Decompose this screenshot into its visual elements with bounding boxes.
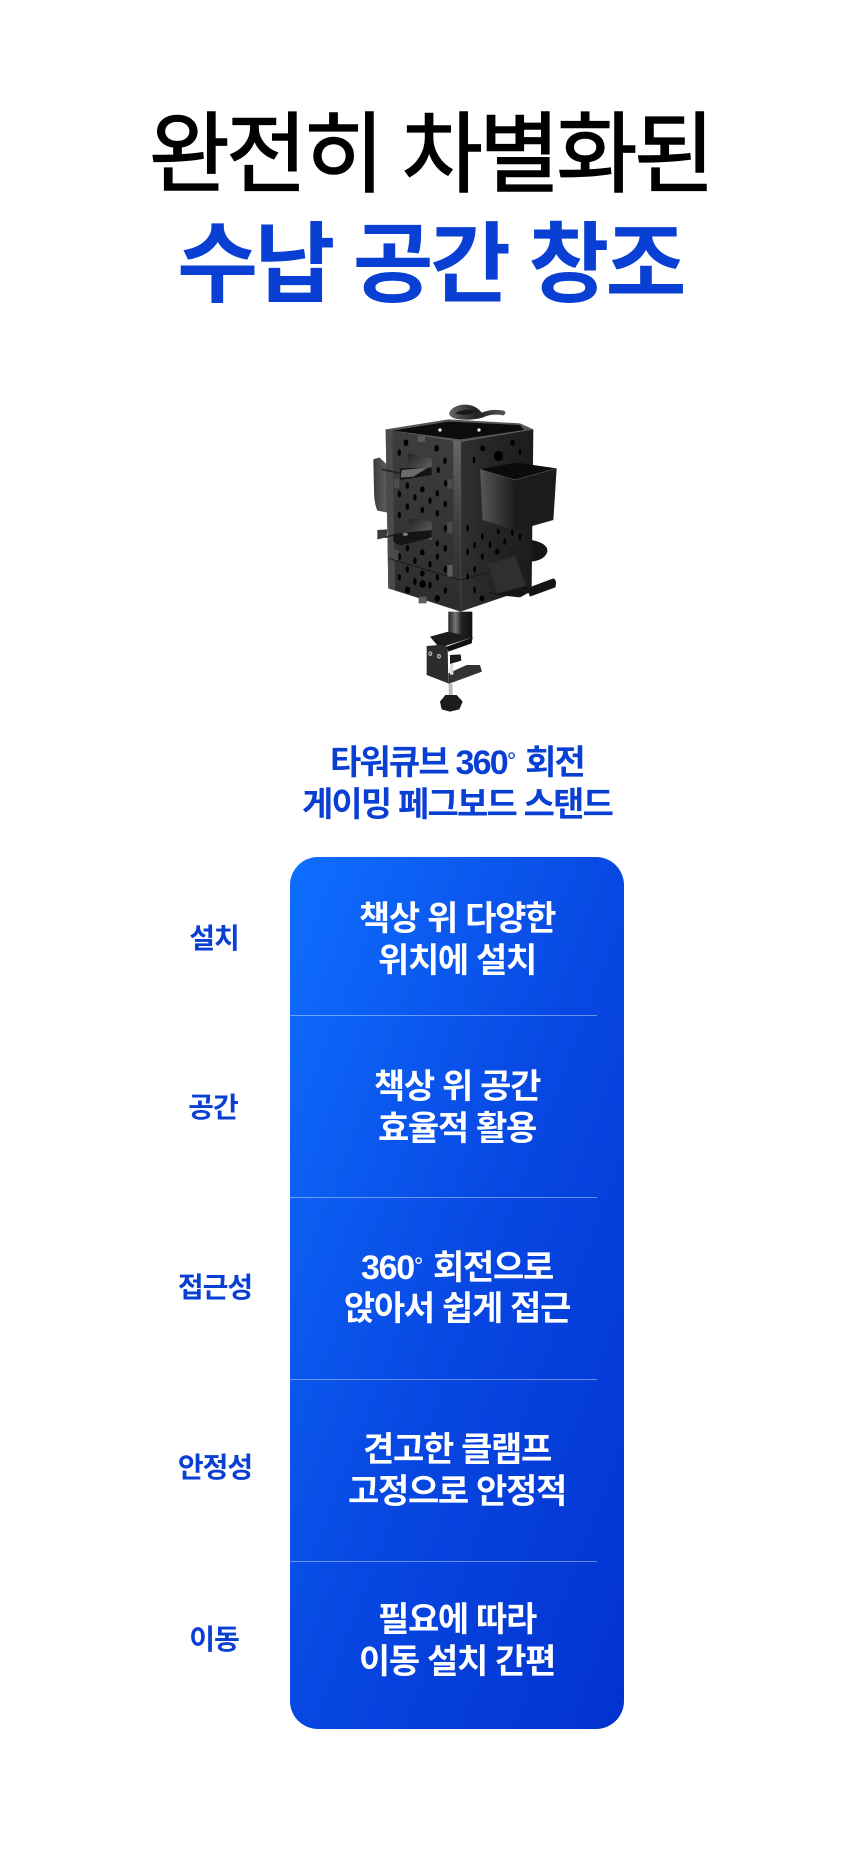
- title line 2: 수납 공간 창조: [177, 215, 683, 314]
- feature: access: 앉아서 쉽게 접근: [344, 1290, 570, 1328]
- feature: mobility: [359, 1601, 555, 1681]
- clamp: [427, 632, 482, 684]
- feature: stability: 고정으로 안정적: [348, 1473, 566, 1511]
- upper hook shelf: [382, 453, 432, 480]
- product name: [302, 744, 613, 824]
- back rear arms: [527, 540, 556, 597]
- feature: installation: [359, 900, 556, 980]
- left side hook pocket: [373, 457, 393, 539]
- pencil cup: [480, 463, 557, 531]
- tower right face: [461, 429, 533, 612]
- corner connector tabs: [394, 436, 453, 603]
- seam lines: [388, 558, 532, 580]
- feature: mobility: 이동 설치 간편: [359, 1643, 555, 1681]
- feature: stability: 견고한 클램프: [363, 1431, 551, 1469]
- clip on top: [449, 405, 506, 420]
- feature: mobility: 필요에 따라: [378, 1601, 536, 1639]
- feature: access: [344, 1249, 570, 1328]
- feature: space: 책상 위 공간: [374, 1068, 540, 1106]
- row label: installation: 설치: [189, 923, 239, 954]
- tower top opening: [386, 419, 533, 442]
- corner strip: [453, 441, 461, 612]
- feature: access: 360° 회전으로: [361, 1249, 553, 1287]
- feature: stability: [348, 1431, 566, 1511]
- row label: access: 접근성: [178, 1272, 252, 1303]
- tower left face: [386, 429, 461, 612]
- feature: space: [374, 1068, 540, 1148]
- title line 1: 완전히 차별화된: [149, 105, 711, 204]
- product name line 1: 타워큐브 360° 회전: [330, 744, 584, 782]
- panel: gradient feature card: [290, 857, 624, 1729]
- feature: space: 효율적 활용: [378, 1110, 536, 1148]
- pegboard holes left: [398, 439, 447, 602]
- pegboard holes right: [466, 440, 521, 601]
- feature: installation: 위치에 설치: [378, 942, 536, 980]
- row label: mobility: 이동: [189, 1624, 239, 1655]
- feature: installation: 책상 위 다양한: [359, 900, 555, 938]
- clamp screw and knob: [440, 684, 463, 712]
- row label: stability: 안정성: [178, 1452, 252, 1483]
- title: [149, 105, 711, 314]
- product illustration: tower cube pegboard stand: [373, 404, 557, 712]
- lower shelf hook: [484, 556, 531, 597]
- row label: space: 공간: [188, 1092, 238, 1123]
- pole: [448, 612, 472, 638]
- lower hook shelf: [385, 518, 432, 546]
- product name line 2: 게이밍 페그보드 스탠드: [302, 786, 612, 824]
